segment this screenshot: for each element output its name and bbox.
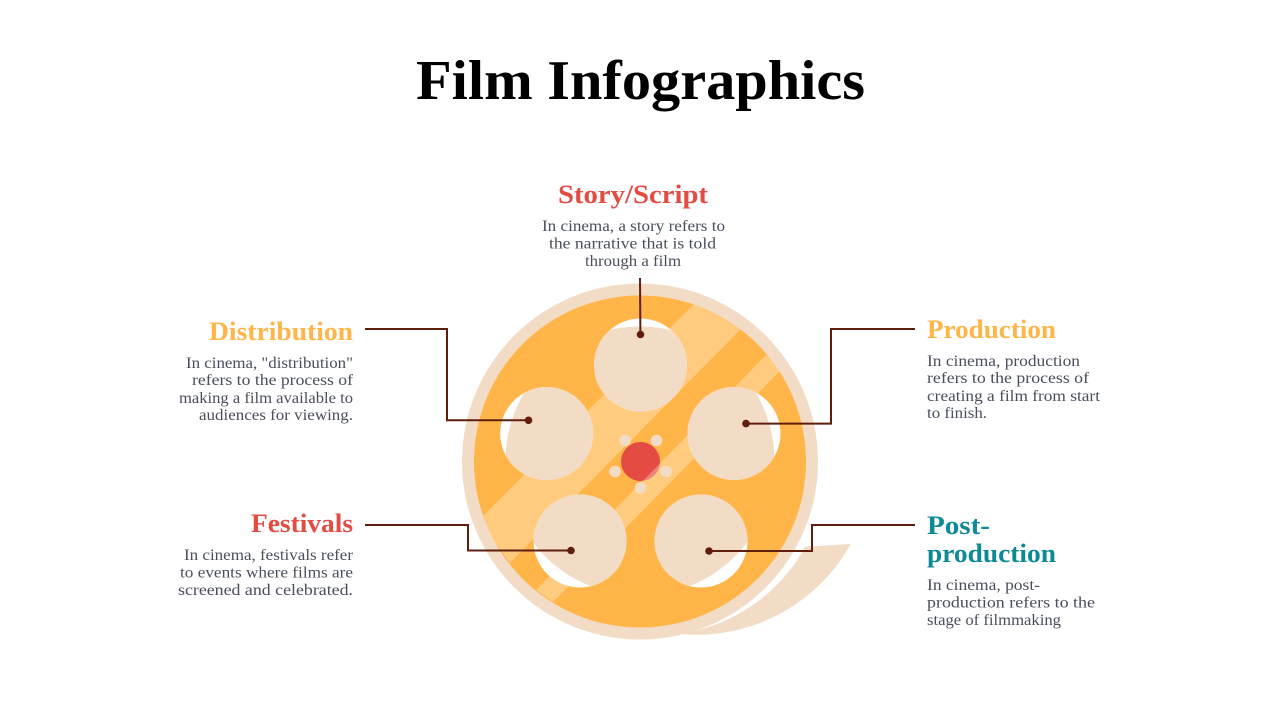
connector: distribution bbox=[365, 329, 532, 424]
text block: production: refers to the process of bbox=[927, 370, 1090, 387]
text block: story/script: Story/Script bbox=[558, 180, 708, 209]
text block: production bbox=[927, 315, 1101, 422]
text block: distribution bbox=[179, 317, 354, 424]
connector: production bbox=[742, 329, 915, 427]
outer ring bbox=[462, 284, 818, 640]
text block: production: Production bbox=[927, 315, 1057, 344]
text block: post-production: production bbox=[927, 539, 1057, 568]
text block: distribution: making a film available to bbox=[179, 390, 353, 407]
text block: production: to finish. bbox=[927, 405, 987, 422]
text block: distribution: In cinema, "distribution" bbox=[186, 355, 353, 372]
text block: story/script: the narrative that is told bbox=[549, 236, 716, 252]
connector: festivals bbox=[365, 525, 575, 554]
text block: festivals: to events where films are bbox=[180, 564, 353, 582]
text block: festivals bbox=[178, 509, 354, 599]
text block: post-production: production refers to the bbox=[927, 594, 1095, 612]
text block: production: In cinema, production bbox=[927, 353, 1080, 370]
text block: festivals: In cinema, festivals refer bbox=[184, 547, 354, 564]
text block: post-production bbox=[927, 511, 1095, 629]
title: Film Infographics bbox=[416, 50, 865, 112]
text block: distribution: Distribution bbox=[209, 317, 354, 346]
film reel bbox=[462, 284, 851, 640]
text block: festivals: Festivals bbox=[251, 509, 353, 538]
reel body bbox=[474, 296, 806, 628]
hub dots bbox=[609, 435, 672, 494]
reel holes bbox=[500, 318, 780, 588]
connector: story bbox=[637, 278, 644, 338]
text block: distribution: refers to the process of bbox=[192, 372, 354, 389]
connector: post-production bbox=[705, 525, 915, 555]
centre hub bbox=[621, 442, 660, 481]
text block: story/script: In cinema, a story refers to bbox=[542, 218, 725, 235]
reel tail bbox=[680, 544, 851, 635]
text block: production: creating a film from start bbox=[927, 388, 1101, 405]
text block: distribution: audiences for viewing. bbox=[199, 407, 353, 424]
text block: story/script: through a film bbox=[585, 253, 682, 270]
text block: post-production: In cinema, post- bbox=[927, 577, 1040, 594]
text block: festivals: screened and celebrated. bbox=[178, 582, 353, 599]
text block: story/script bbox=[542, 180, 725, 270]
diagonal film stripes bbox=[479, 300, 783, 602]
text block: post-production: stage of filmmaking bbox=[927, 612, 1061, 629]
text block: post-production: Post- bbox=[927, 511, 990, 540]
